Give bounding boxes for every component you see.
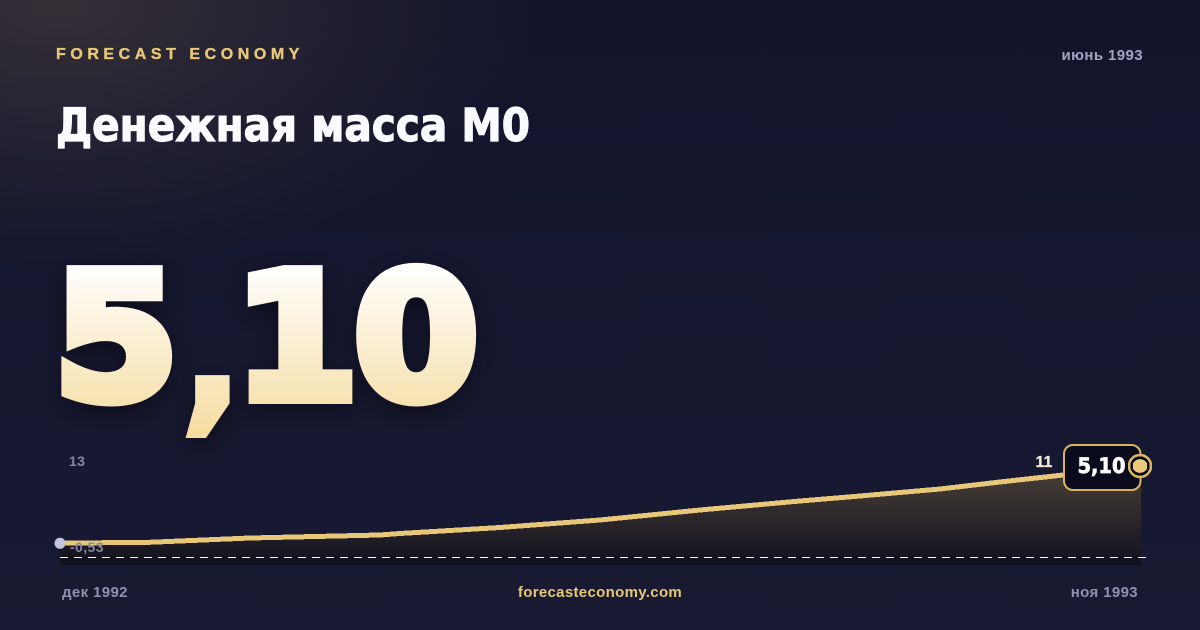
brand label: FORECAST ECONOMY [56,46,304,63]
big value [54,236,478,456]
zero baseline [60,556,1147,558]
title: Денежная масса M0 [56,99,530,152]
big value: 0 [354,236,478,439]
axis min label: -0,53 [70,539,104,555]
current value callout: 5,10 [1078,454,1126,478]
axis max label: 13 [69,453,85,469]
big value: 5 [54,236,178,439]
current value callout [1064,445,1140,490]
date label: июнь 1993 [1062,47,1143,64]
footer site label: forecasteconomy.com [518,584,682,601]
peak value label: 11 [1036,454,1053,471]
start point marker [54,538,66,549]
big value: 1 [234,236,359,439]
chart line [60,475,1063,543]
x axis end label: ноя 1993 [1071,584,1138,601]
big value: , [175,236,250,456]
current point marker [1129,455,1151,477]
x axis start label: дек 1992 [62,584,128,601]
chart area fill [60,474,1141,565]
area chart [60,474,1147,565]
